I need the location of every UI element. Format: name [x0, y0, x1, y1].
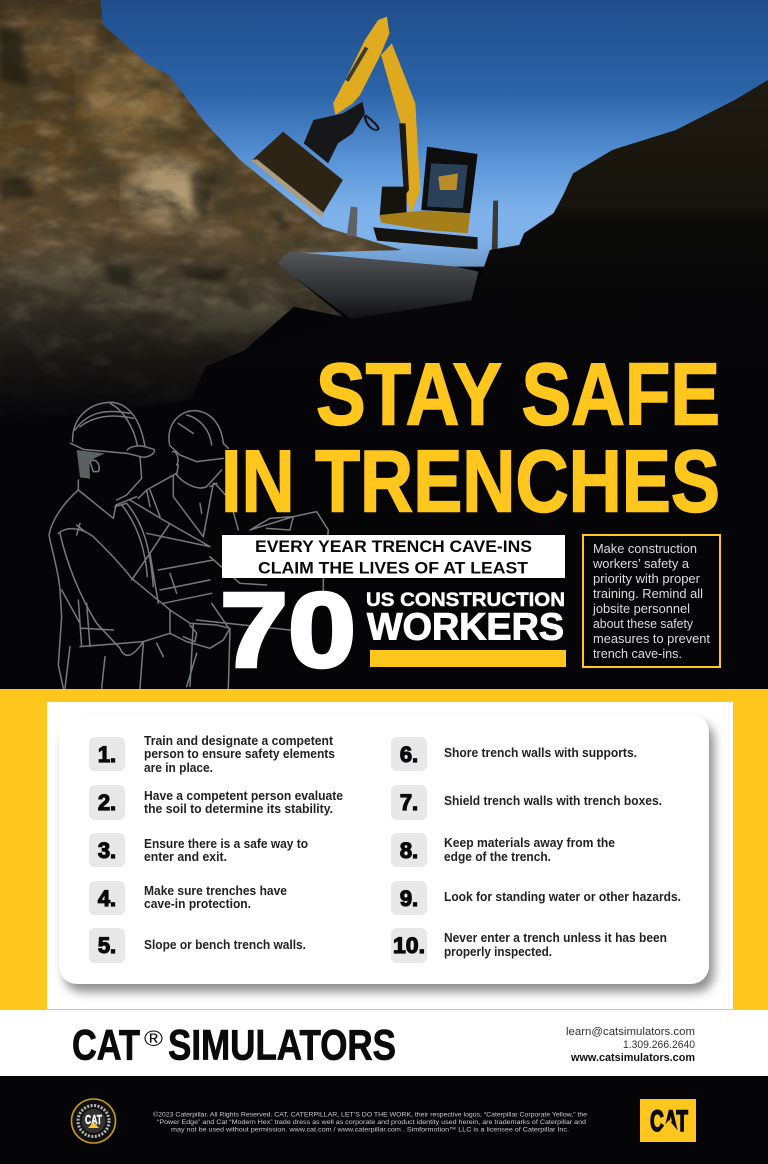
item 1: 1.	[98, 742, 116, 767]
item 3: enter and exit.	[144, 850, 227, 864]
photo fade	[0, 240, 768, 425]
soil crevices	[0, 27, 289, 287]
callout text: measures to prevent	[593, 631, 710, 646]
item 4: cave-in protection.	[144, 897, 251, 911]
callout box	[583, 535, 720, 667]
legal text: ©2023 Caterpillar. All Rights Reserved. CAT, CATERPILLAR, LET’S DO THE WORK, their respective logos, “Caterpillar Corporate Yellow,” the	[153, 1110, 587, 1118]
item 10: Never enter a trench unless it has been	[444, 931, 667, 945]
item 2: 2.	[98, 790, 116, 815]
item 6: Shore trench walls with supports.	[444, 746, 637, 760]
statistic banner	[222, 535, 565, 578]
legal text: may not be used without permission. www.cat.com / www.caterpillar.com . Simformotion™ LLC is a licensee of Caterpillar Inc.	[171, 1126, 569, 1134]
item 10: properly inspected.	[444, 945, 552, 959]
item 8	[391, 833, 615, 867]
callout text: priority with proper	[593, 571, 701, 586]
excavator stick	[333, 17, 389, 115]
icon: CAT logo	[640, 1099, 696, 1142]
brand wordmark: CAT	[72, 1022, 140, 1070]
item 1: Train and designate a competent	[144, 734, 334, 748]
item 7: Shield trench walls with trench boxes.	[444, 794, 662, 808]
bucket	[252, 132, 343, 217]
item 3: Ensure there is a safe way to	[144, 837, 308, 851]
excavator body	[380, 211, 470, 233]
contact details: learn@catsimulators.com	[566, 1026, 695, 1038]
item 2: the soil to determine its stability.	[144, 802, 333, 816]
right bank	[186, 80, 768, 427]
big number 70: 70	[220, 572, 356, 690]
icon: seal: CAT	[85, 1112, 102, 1127]
item 3: 3.	[98, 838, 116, 863]
banner text: EVERY YEAR TRENCH CAVE-INS	[255, 537, 532, 556]
cab	[421, 147, 478, 213]
item 5: 5.	[98, 933, 116, 958]
item 5	[89, 928, 306, 963]
item 1	[89, 734, 335, 775]
tracks	[373, 227, 478, 249]
photo: excavator in trench	[0, 0, 768, 427]
legal text	[153, 1110, 587, 1134]
attachment	[304, 102, 365, 163]
brand wordmark	[72, 1022, 396, 1070]
soil wall	[0, 0, 402, 400]
footer white strip	[0, 1010, 768, 1076]
line art: two construction workers	[49, 402, 328, 688]
item 10	[391, 928, 667, 963]
card shadow	[64, 722, 714, 992]
item 9	[391, 881, 681, 915]
excavator boom	[381, 43, 420, 213]
concrete pipe	[278, 252, 479, 320]
icon: seal	[72, 1099, 116, 1143]
item 4: Make sure trenches have	[144, 884, 287, 898]
item 4: 4.	[98, 886, 116, 911]
item 5: Slope or bench trench walls.	[144, 938, 306, 952]
title	[221, 344, 720, 530]
sky	[0, 0, 768, 267]
contact details: 1.309.266.2640	[623, 1039, 695, 1051]
footer black strip	[0, 1076, 768, 1164]
item 2	[89, 785, 343, 820]
white panel	[47, 702, 733, 1009]
callout text: about these safety	[593, 616, 693, 631]
item 8: edge of the trench.	[444, 850, 551, 864]
item 3	[89, 833, 308, 867]
contact details	[566, 1026, 695, 1064]
brand wordmark: SIMULATORS	[168, 1022, 396, 1070]
yellow accent bar	[370, 650, 566, 667]
item 8: 8.	[400, 838, 418, 863]
callout text: training. Remind all	[593, 586, 703, 601]
callout text: trench cave-ins.	[593, 646, 682, 661]
counterweight	[380, 187, 407, 217]
callout text	[592, 541, 710, 661]
callout text: jobsite personnel	[592, 601, 690, 616]
legal text: “Power Edge” and Cat “Modern Hex” trade dress as well as corporate and product identity used herein, are trademarks of Caterpillar and	[157, 1119, 586, 1126]
hydraulic cylinder	[345, 47, 368, 82]
item 10: 10.	[393, 933, 425, 958]
contact details: www.catsimulators.com	[570, 1052, 695, 1064]
item 9: 9.	[400, 886, 418, 911]
fence posts	[492, 201, 498, 250]
item 8: Keep materials away from the	[444, 836, 615, 850]
item 1: are in place.	[144, 761, 213, 775]
safety measures card	[59, 714, 709, 984]
banner text	[255, 537, 532, 578]
workers label: WORKERS	[367, 606, 564, 648]
item 6	[391, 737, 637, 771]
item 1: person to ensure safety elements	[144, 747, 335, 761]
item 4	[89, 881, 287, 915]
item 9: Look for standing water or other hazards.	[444, 890, 681, 904]
US construction label: US CONSTRUCTION	[366, 590, 565, 611]
item 7: 7.	[400, 790, 418, 815]
yellow band	[0, 689, 768, 1010]
banner text: CLAIM THE LIVES OF AT LEAST	[258, 558, 529, 578]
callout text: Make construction	[593, 541, 697, 556]
item 6: 6.	[400, 742, 418, 767]
brand wordmark: ®	[144, 1026, 163, 1051]
item 2: Have a competent person evaluate	[144, 789, 343, 803]
callout text: workers’ safety a	[592, 556, 690, 571]
item 7	[391, 785, 662, 820]
icon: CAT logo: CAT	[650, 1105, 688, 1138]
